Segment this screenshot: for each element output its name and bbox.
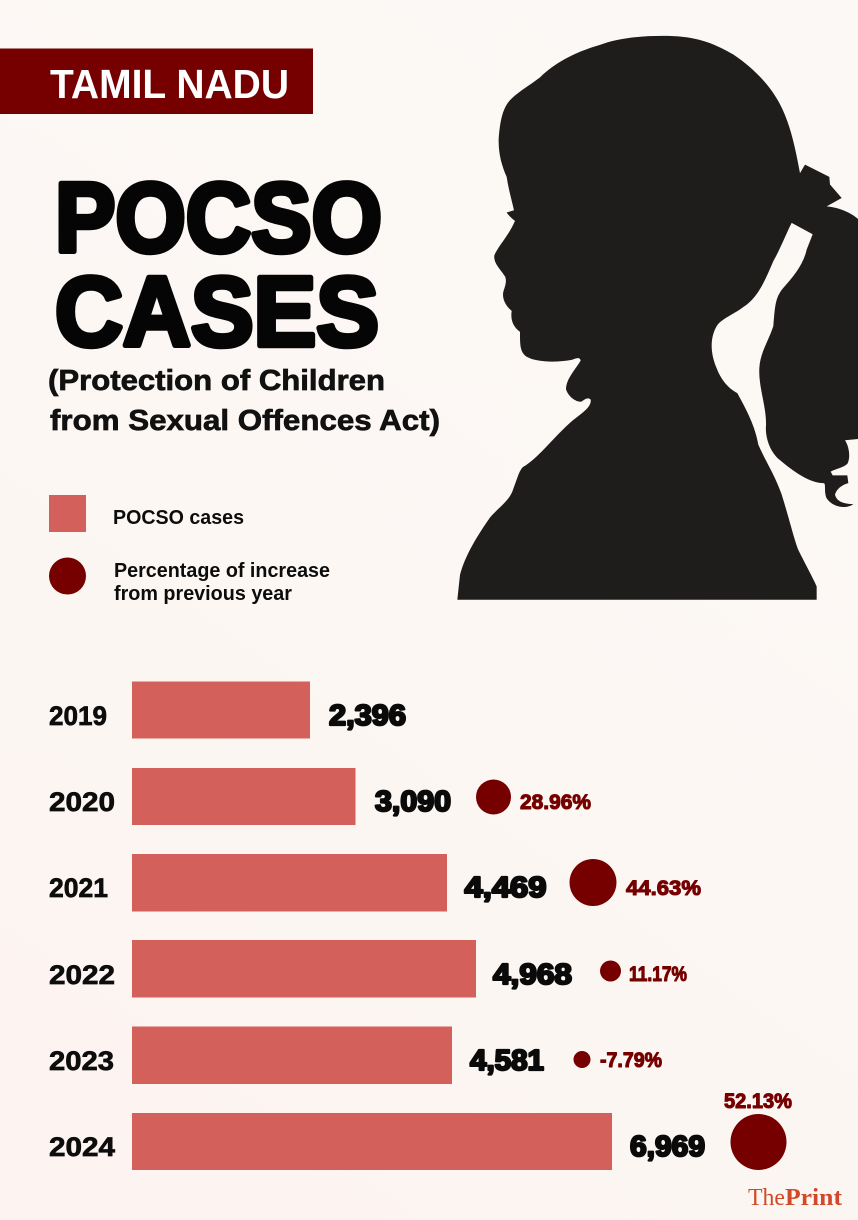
- row: 2019: 2,396: [329, 700, 406, 732]
- row: 2024: 2024: [49, 1132, 115, 1162]
- title: POCSO: [55, 162, 382, 272]
- logo: ThePrint: Print: [785, 1185, 842, 1211]
- legend: percentage of increase: Percentage of increase: [114, 560, 330, 582]
- legend: percentage of increase: from previous year: [114, 583, 292, 605]
- row: 2023: -7.79%: [600, 1049, 662, 1072]
- row: 2021: 4,469: [464, 872, 546, 904]
- banner: Tamil Nadu: TAMIL NADU: [50, 61, 289, 107]
- row: 2024: 6,969: [630, 1131, 705, 1163]
- title: CASES: [55, 256, 379, 366]
- row: 2021: 2021: [49, 873, 108, 903]
- row: 2020: 3,090: [375, 786, 451, 818]
- row: 2019: 2019: [49, 701, 107, 731]
- logo: ThePrint: [748, 1185, 842, 1211]
- subtitle: [48, 365, 440, 437]
- row: 2019: [49, 682, 406, 738]
- row: 2021: [49, 854, 701, 912]
- row: 2022: 4,968: [493, 959, 572, 991]
- subtitle: from Sexual Offences Act): [50, 405, 440, 437]
- legend: percentage of increase: [49, 558, 330, 605]
- row: 2023: 4,581: [470, 1045, 544, 1077]
- icon: child silhouette: [457, 36, 858, 600]
- row: 2020: [49, 768, 591, 825]
- row: 2020: 2020: [49, 787, 115, 817]
- banner: Tamil Nadu: [0, 48, 313, 114]
- row: 2024: [49, 1090, 792, 1170]
- legend: POCSO cases: POCSO cases: [113, 507, 244, 529]
- legend: [49, 495, 330, 605]
- logo: ThePrint: The: [748, 1185, 785, 1211]
- row: 2022: 11.17%: [629, 963, 687, 986]
- row: 2024: 52.13%: [724, 1090, 792, 1113]
- row: 2022: 2022: [49, 960, 115, 990]
- subtitle: (Protection of Children: [48, 365, 385, 397]
- row: 2023: [49, 1026, 662, 1084]
- title: [55, 162, 382, 366]
- bar chart: [49, 682, 792, 1170]
- legend: POCSO cases: [49, 495, 244, 532]
- row: 2020: 28.96%: [520, 791, 591, 814]
- row: 2022: [49, 940, 687, 998]
- row: 2023: 2023: [49, 1046, 114, 1076]
- row: 2021: 44.63%: [626, 877, 701, 900]
